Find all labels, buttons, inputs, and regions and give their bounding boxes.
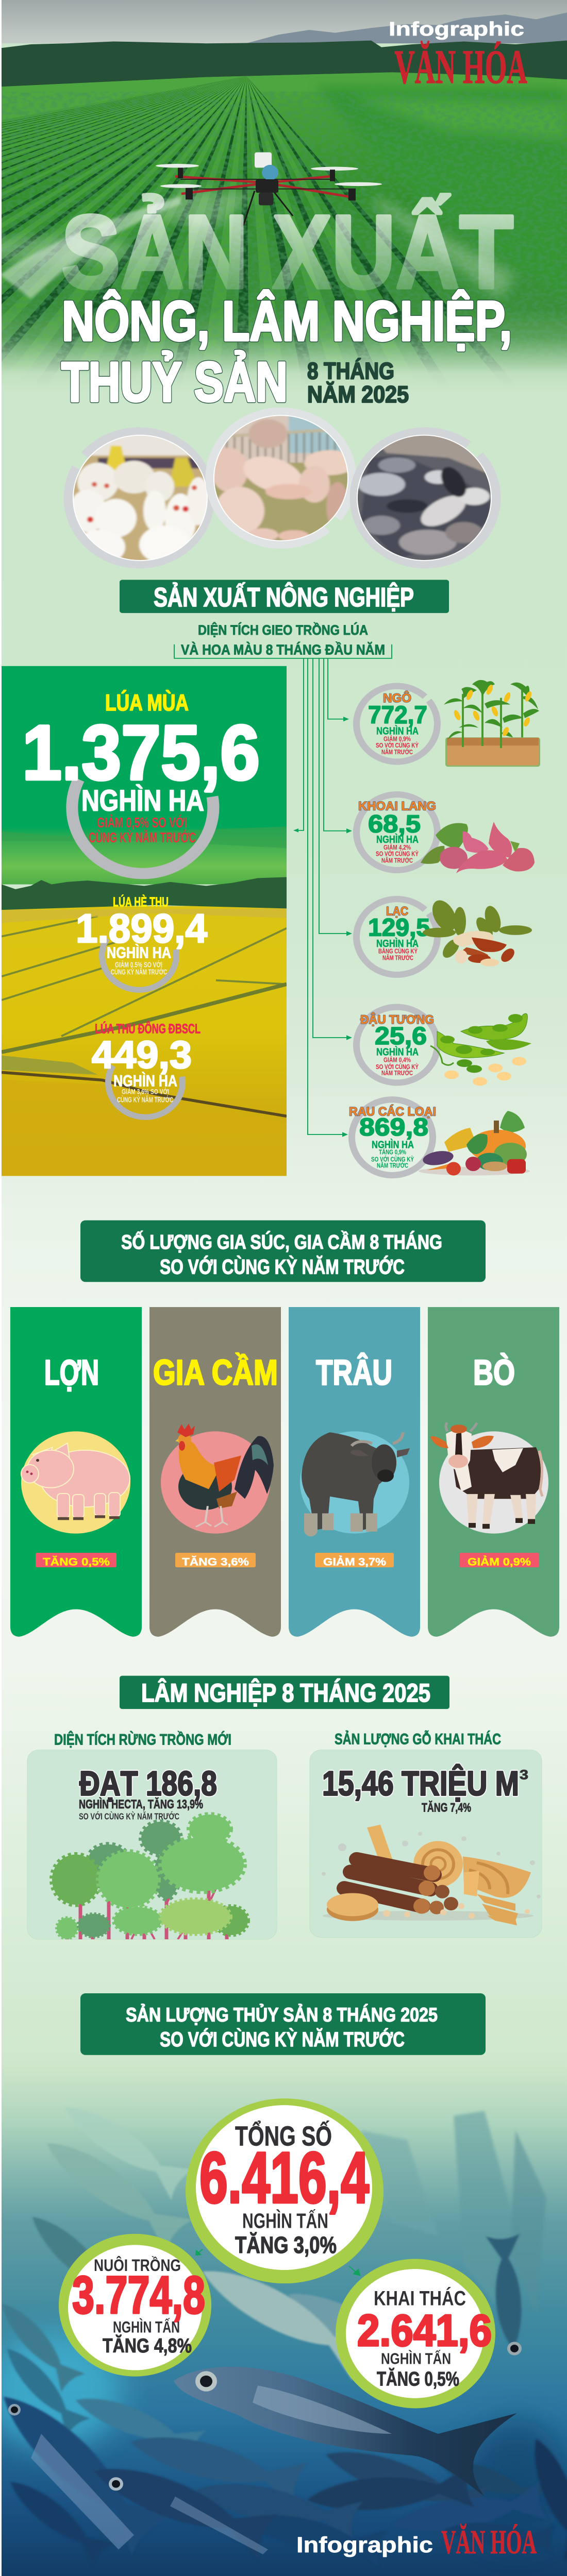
heading: fishery (80, 1993, 486, 2055)
logo: Infographic Văn Hóa: Infographic (389, 18, 524, 40)
lúa mùa stat (22, 689, 260, 874)
stat: rau các loại: 869,8 (359, 1112, 428, 1141)
illustration: logs and planks (322, 1825, 541, 1925)
stat: nuôi trồng: NGHÌN TẤN (113, 2318, 180, 2336)
stat: lạc: LẠC (386, 904, 408, 918)
subheading: planted area (174, 622, 392, 658)
heading: livestock: SO VỚI CÙNG KỲ NĂM TRƯỚC (160, 1255, 405, 1278)
icon: pig (22, 1444, 129, 1520)
panel: timber output (310, 1730, 542, 1938)
stat: khai thác: NGHÌN TẤN (381, 2349, 451, 2367)
stat: khai thác (336, 2259, 495, 2408)
title: THUỶ SẢN (61, 350, 288, 413)
stat: đậu tương: 25,6 (375, 1022, 427, 1050)
panel: timber output: SẢN LƯỢNG GỖ KHAI THÁC (335, 1730, 501, 1748)
panel: buffalo (289, 1307, 420, 1637)
panel: cattle (428, 1307, 559, 1637)
icon: soybeans (430, 1013, 531, 1086)
lúa thu đông stat: 449,3 (92, 1033, 192, 1076)
badge: tăng 0,5% (36, 1553, 116, 1568)
lúa thu đông stat: NGHÌN HA (113, 1072, 177, 1090)
heading: livestock (80, 1221, 486, 1282)
stat: khoai lang: KHOAI LANG (358, 799, 436, 813)
badge: giảm 0,9%: GIẢM 0,9% (468, 1555, 531, 1568)
lúa mùa stat: LÚA MÙA (105, 689, 189, 716)
logo: footer: Infographic (296, 2533, 433, 2557)
stat: ngô: 772,7 (368, 701, 427, 729)
panel: new forest area (27, 1730, 277, 1939)
lúa mùa stat: CÙNG KỲ NĂM TRƯỚC (89, 829, 196, 846)
lúa mùa stat: NGHÌN HA (81, 784, 204, 817)
heading: livestock: SỐ LƯỢNG GIA SÚC, GIA CẦM 8 THÁNG (121, 1230, 442, 1253)
stat: ngô: NGHÌN HA (376, 724, 419, 737)
stat: lạc: 129,5 (368, 913, 430, 941)
lúa hè thu stat: CÙNG KỲ NĂM TRƯỚC (111, 968, 167, 976)
arrow: total to capture (349, 2266, 360, 2275)
panel: pigs (10, 1307, 142, 1637)
logo: footer (296, 2523, 537, 2561)
stat: khoai lang: GIẢM 4,2% (383, 844, 411, 851)
stat: đậu tương: SO VỚI CÙNG KỲ (376, 1063, 419, 1071)
stat: rau các loại (336, 1084, 449, 1191)
stat: khai thác: KHAI THÁC (374, 2286, 466, 2310)
panel: new forest area: ĐẠT 186,8 (79, 1765, 217, 1803)
badge: tăng 0,5%: TĂNG 0,5% (43, 1555, 110, 1568)
title: 8 THÁNG (307, 358, 394, 384)
stat: nuôi trồng: TĂNG 4,8% (103, 2334, 192, 2357)
heading: fishery: SẢN LƯỢNG THỦY SẢN 8 THÁNG 2025 (126, 2004, 438, 2026)
panel: new forest area: DIỆN TÍCH RỪNG TRỒNG MỚI (54, 1730, 231, 1748)
stat: rau các loại: NĂM TRƯỚC (377, 1162, 408, 1170)
stat: đậu tương: NĂM TRƯỚC (381, 1069, 413, 1077)
panel: rice (2, 666, 287, 1176)
stat: ngô: GIẢM 0,9% (383, 735, 411, 743)
panel: poultry (149, 1307, 281, 1637)
stat: tổng số: NGHÌN TẤN (242, 2209, 328, 2233)
stat: tổng số: 6.416,4 (199, 2137, 369, 2218)
page edge strip (0, 0, 2, 2576)
logo: Infographic Văn Hóa (389, 18, 527, 93)
stat: nuôi trồng: 3.774,8 (72, 2265, 205, 2325)
stat: tổng số: TĂNG 3,0% (235, 2232, 337, 2259)
stat: rau các loại: SO VỚI CÙNG KỲ (371, 1156, 414, 1163)
stat: tổng số: TỔNG SỐ (235, 2121, 332, 2151)
heading: forestry (120, 1676, 449, 1709)
heading: forestry: LÂM NGHIỆP 8 THÁNG 2025 (141, 1679, 430, 1708)
stat: khoai lang: SO VỚI CÙNG KỲ (376, 850, 419, 857)
lúa hè thu stat: 1.899,4 (76, 906, 207, 951)
stat: ngô: NGÔ (383, 690, 411, 705)
panel: buffalo: TRÂU (316, 1353, 392, 1392)
stat: lạc: NGHÌN HA (376, 937, 419, 950)
stat: ngô: SO VỚI CÙNG KỲ (376, 741, 419, 749)
title: NĂM 2025 (307, 381, 409, 408)
lúa hè thu stat: LÚA HÈ THU (113, 894, 169, 909)
lúa mùa stat: GIẢM 0,5% SO VỚI (97, 814, 187, 831)
title: THUỶ SẢN (61, 350, 288, 413)
stat: lạc (340, 884, 454, 990)
lúa hè thu stat: GIẢM 0.5% SO VỚI (115, 960, 162, 969)
panel: timber output: 15,46 TRIỆU M (322, 1765, 519, 1803)
stat: khai thác: TĂNG 0,5% (377, 2367, 459, 2390)
icon: vegetables (419, 1111, 530, 1176)
stat: rau các loại: TĂNG 0,9% (379, 1148, 406, 1156)
stat: đậu tương: NGHÌN HA (376, 1045, 419, 1058)
stat: rau các loại: NGHÌN HA (372, 1138, 414, 1150)
badge: tăng 3,6%: TĂNG 3,6% (182, 1555, 249, 1568)
icon: cow (430, 1422, 542, 1529)
stat: tổng số (186, 2098, 383, 2283)
stat: lạc: BẰNG CÙNG KỲ (378, 947, 418, 955)
lúa thu đông stat (92, 1021, 201, 1117)
photo: pig farm (205, 408, 356, 549)
icon: corn plants (444, 680, 540, 767)
badge: giảm 3,7%: GIẢM 3,7% (323, 1555, 386, 1568)
panel: timber output: 15,46 TRIỆU M (322, 1765, 519, 1803)
arrows: connectors to crops (293, 658, 352, 1137)
panel: new forest area: ĐẠT 186,8 (79, 1765, 217, 1803)
photo: school of fish (0, 2067, 567, 2576)
icon: agricultural drone (156, 152, 382, 226)
stat: nuôi trồng: NUÔI TRỒNG (94, 2256, 181, 2275)
stat: khoai lang (340, 779, 454, 886)
lúa hè thu stat (76, 894, 207, 990)
stat: khoai lang: NĂM TRƯỚC (381, 857, 413, 864)
icon: peanuts (423, 897, 532, 967)
panel: cattle: BÒ (473, 1353, 515, 1392)
stat: khoai lang: NGHÌN HA (376, 833, 419, 845)
stat: lạc: NĂM TRƯỚC (382, 954, 413, 961)
stat: nuôi trồng (59, 2234, 211, 2377)
lúa hè thu stat: NGHÌN HA (107, 944, 171, 961)
heading: sản xuất nông nghiệp: SẢN XUẤT NÔNG NGHIỆP (154, 582, 414, 612)
arrow: total to aquaculture (196, 2249, 203, 2255)
panel: timber output: 3 (520, 1767, 528, 1782)
illustration: trees (52, 1815, 248, 1939)
stat: khoai lang: 68,5 (368, 809, 421, 838)
lúa thu đông stat: CÙNG KỲ NĂM TRƯỚC (117, 1095, 173, 1104)
panel: new forest area: NGHÌN HECTA, TĂNG 13,9% (79, 1797, 203, 1811)
panel: pigs: LỢN (44, 1353, 99, 1392)
lúa thu đông stat: LÚA THU ĐÔNG ĐBSCL (95, 1021, 201, 1036)
icon: rooster (175, 1423, 274, 1527)
stat: đậu tương (340, 992, 454, 1098)
stat: rau các loại: RAU CÁC LOẠI (349, 1104, 436, 1118)
title (61, 194, 513, 413)
stat: khai thác: 2.641,6 (357, 2306, 492, 2355)
heading: fishery: SO VỚI CÙNG KỲ NĂM TRƯỚC (160, 2027, 405, 2051)
lúa mùa stat: 1.375,6 (22, 709, 260, 796)
icon: water buffalo (302, 1432, 410, 1536)
icon: sweet potatoes (421, 822, 535, 873)
panel: poultry: GIA CẦM (153, 1353, 278, 1392)
stat: ngô: NĂM TRƯỚC (381, 748, 413, 756)
badge: giảm 3,7% (315, 1553, 394, 1568)
photo: poultry farm (64, 427, 213, 569)
lúa thu đông stat: GIẢM 3,6% SO VỚI (122, 1087, 169, 1096)
stat: ngô (340, 671, 454, 777)
subheading: planted area: DIỆN TÍCH GIEO TRỒNG LÚA (198, 622, 368, 638)
panel: new forest area: SO VỚI CÙNG KỲ NĂM TRƯỚC (79, 1811, 179, 1821)
stat: đậu tương: GIẢM 0,4% (383, 1056, 411, 1064)
badge: tăng 3,6% (175, 1553, 256, 1568)
hero photo: drone over green field (0, 0, 567, 391)
stat: đậu tương: ĐẬU TƯƠNG (360, 1012, 434, 1027)
photo: catfish pond (349, 427, 501, 569)
badge: giảm 0,9% (459, 1553, 539, 1568)
panel: timber output: TĂNG 7,4% (422, 1800, 471, 1815)
subheading: planted area: VÀ HOA MÀU 8 THÁNG ĐẦU NĂM (181, 641, 385, 658)
heading: sản xuất nông nghiệp (120, 580, 449, 613)
